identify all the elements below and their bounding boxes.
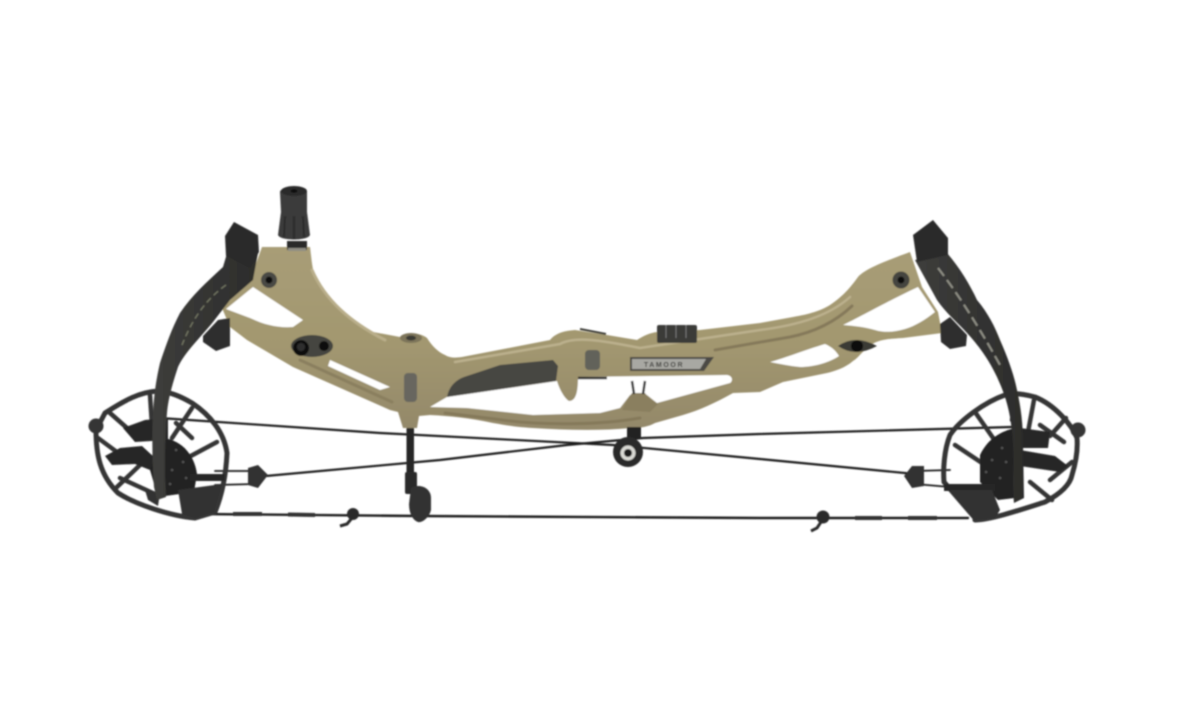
cable: upper left to lower right	[160, 418, 915, 474]
top rest accent	[580, 329, 606, 334]
name plate	[630, 357, 714, 371]
bolt upper right	[892, 272, 910, 288]
central window	[430, 375, 732, 415]
limb block	[940, 317, 967, 349]
upper left window	[226, 287, 303, 327]
right limb	[913, 220, 1024, 503]
top stabilizer knob	[278, 186, 310, 251]
right slit window	[770, 344, 839, 367]
cam hub	[150, 438, 197, 497]
left cable silencer	[248, 465, 268, 488]
upper right window	[843, 287, 935, 332]
string serving left	[233, 514, 315, 515]
right cable silencer	[904, 466, 924, 488]
cam mechanism	[944, 428, 1068, 491]
cam outer rim	[96, 391, 227, 518]
cam bottom module	[145, 484, 222, 518]
main bowstring	[200, 514, 968, 518]
left slit window	[328, 360, 390, 390]
cam harness lines	[215, 470, 950, 487]
cable slide pulley	[613, 437, 643, 467]
cam bottom module	[950, 490, 1000, 520]
limb head	[225, 222, 259, 268]
left cam	[88, 391, 227, 518]
cam outer rim	[944, 394, 1077, 520]
cam hub holes	[986, 448, 1006, 478]
limb head	[913, 220, 948, 262]
cam hub	[980, 428, 1015, 500]
cam mechanism	[105, 418, 225, 481]
sight mount right	[838, 340, 877, 352]
cable: lower left to upper right	[255, 427, 1012, 477]
bow strings and cables	[160, 418, 1012, 518]
riser highlights	[300, 270, 852, 424]
right cam	[944, 394, 1086, 520]
cam spokes	[98, 395, 217, 494]
limb graphic	[938, 268, 1000, 365]
grip	[447, 360, 558, 397]
cam nub	[88, 418, 104, 434]
limb block	[203, 318, 230, 351]
limb graphic	[182, 285, 226, 345]
post cap and badge	[400, 333, 422, 402]
rest mount	[657, 325, 697, 343]
lower rest accent	[578, 377, 607, 379]
right string stop	[811, 510, 830, 531]
string serving right	[855, 516, 937, 520]
riser badge	[585, 350, 600, 370]
name plate: TAMOOR	[644, 362, 684, 369]
left limb	[152, 222, 259, 500]
cam nub	[1070, 422, 1086, 438]
riser windows	[226, 287, 935, 415]
stabilizer rod and cable stop	[405, 428, 431, 522]
riser body	[222, 247, 942, 430]
sight mount left	[291, 335, 333, 357]
bolt upper left	[261, 272, 277, 288]
cable guard arm	[622, 381, 658, 439]
left string stop	[340, 508, 359, 526]
cam hub holes	[170, 450, 186, 484]
cam spokes	[955, 396, 1072, 500]
